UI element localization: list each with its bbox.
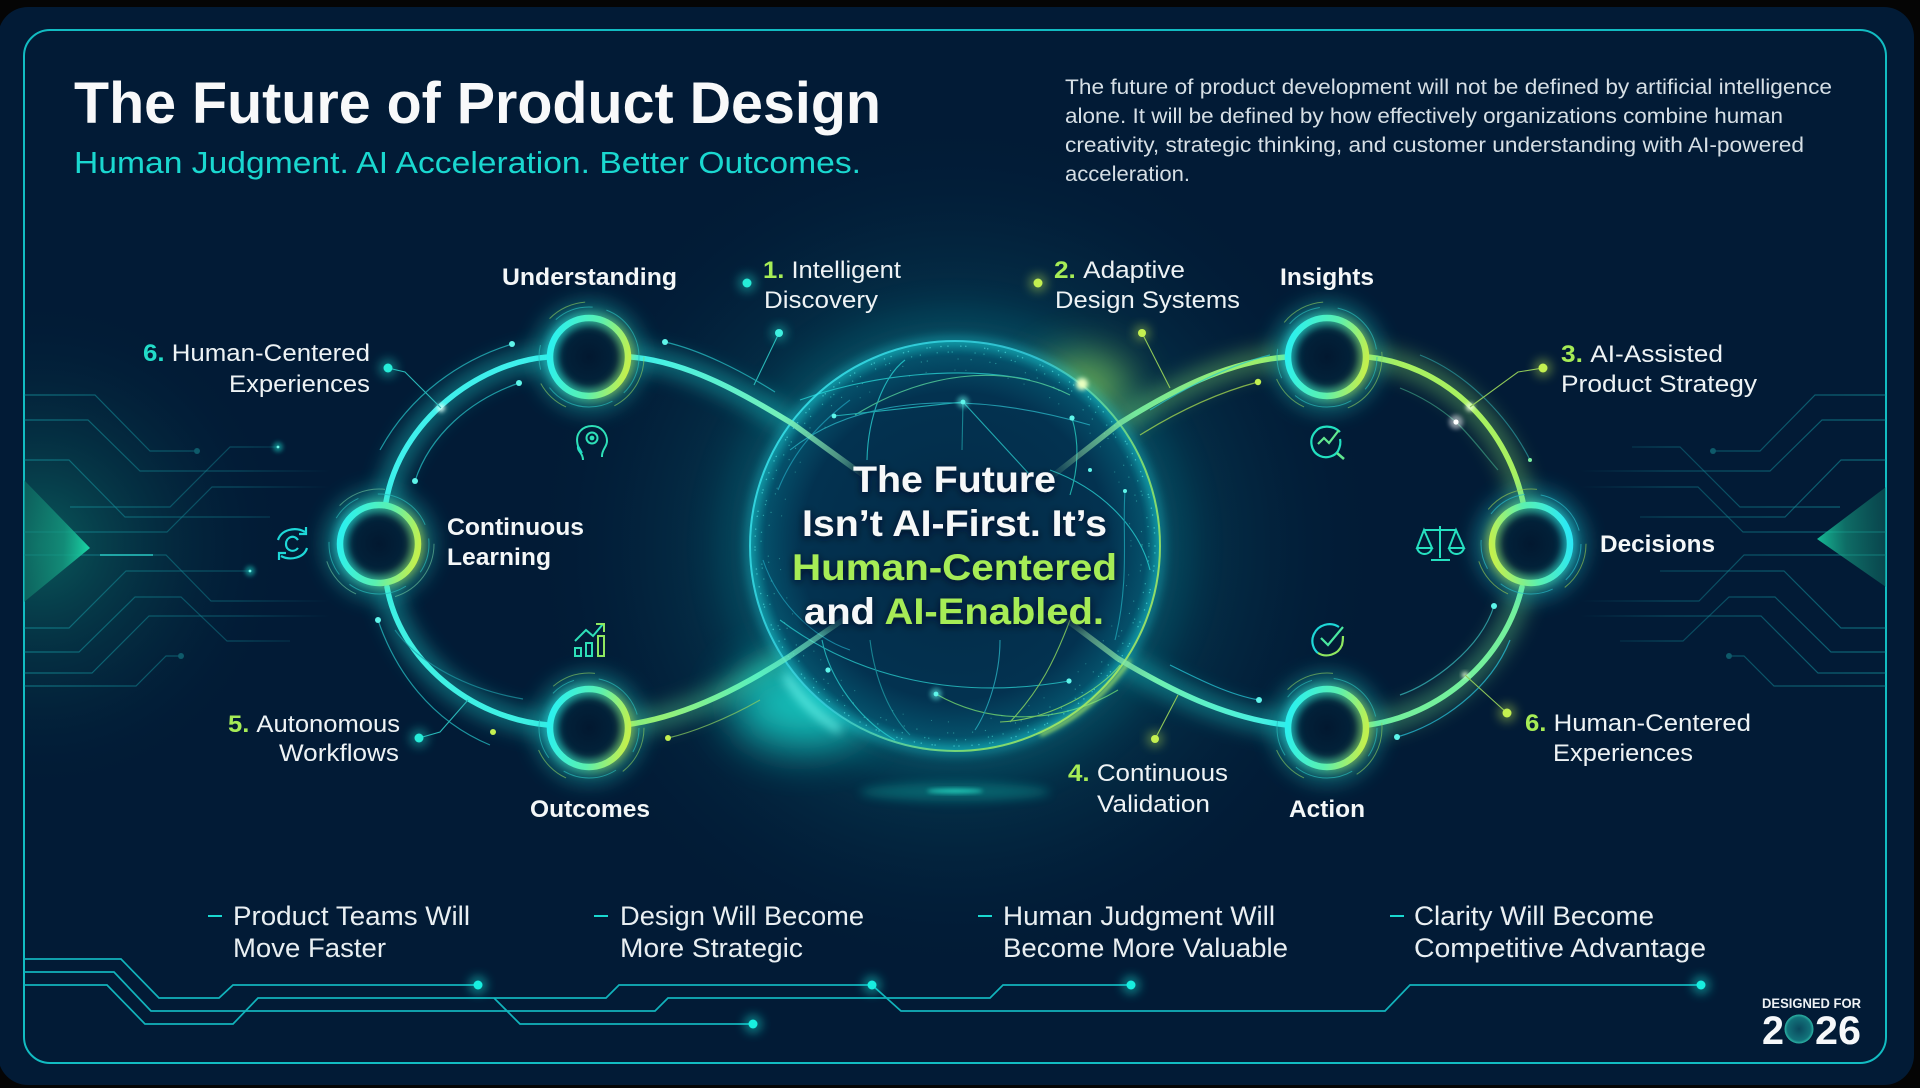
- label: 6 human-centered experiences left: 6. Human-Centered: [143, 340, 370, 367]
- label: 6 human-centered experiences left: [143, 340, 370, 398]
- label: 3 ai-assisted product strategy: 3. AI-Assisted: [1561, 341, 1723, 368]
- node ring: decisions: [1476, 489, 1586, 599]
- badge: designed for 2026: [1762, 996, 1861, 1053]
- center statement: Human-Centered: [792, 546, 1117, 588]
- takeaway: human judgment: Become More Valuable: [1003, 933, 1288, 963]
- icon: balance scale: [1417, 526, 1464, 560]
- label: 3 ai-assisted product strategy: Product Strategy: [1561, 371, 1758, 398]
- takeaway: design: [594, 901, 864, 963]
- left circuit decoration: [24, 395, 330, 686]
- label: continuous learning: Continuous: [447, 514, 584, 541]
- label: 1 intelligent discovery: 1. Intelligent: [763, 257, 901, 284]
- badge: designed for 2026: 2: [1762, 1009, 1784, 1053]
- bottom circuit traces: [24, 959, 1710, 1033]
- takeaway: human judgment: Human Judgment Will: [1003, 901, 1275, 931]
- label: continuous learning: Learning: [447, 544, 551, 571]
- label: 5 autonomous workflows: [228, 711, 400, 767]
- sphere: [730, 321, 1180, 771]
- callout leaders: [379, 274, 1552, 747]
- icon: magnifier insight: [1311, 427, 1344, 459]
- center statement: The Future: [853, 458, 1056, 500]
- intro text block: [1065, 75, 1832, 186]
- icon: head with target: [577, 426, 607, 460]
- right circuit decoration: [1580, 395, 1886, 686]
- takeaway: design: More Strategic: [620, 933, 803, 963]
- intro text block: creativity, strategic thinking, and customer understanding with AI-powered: [1065, 133, 1804, 157]
- label: 6 human-centered experiences left: Experiences: [229, 371, 370, 398]
- label: 1 intelligent discovery: [763, 257, 901, 314]
- title: The Future of Product Design: [74, 71, 881, 136]
- takeaway: product teams: [208, 901, 470, 963]
- right arrow wedge: [1817, 487, 1886, 587]
- label: decisions: Decisions: [1600, 531, 1715, 558]
- node ring: action: [1272, 673, 1382, 783]
- label: 6 human-centered experiences right: 6. Human-Centered: [1525, 710, 1751, 737]
- takeaway: product teams: Product Teams Will: [233, 901, 470, 931]
- takeaway: human judgment: [978, 901, 1288, 963]
- infinity loop glow: [386, 357, 1523, 725]
- takeaway: clarity: [1390, 901, 1706, 963]
- label: 3 ai-assisted product strategy: [1561, 341, 1758, 398]
- sphere dust: [750, 341, 1160, 751]
- takeaway: design: Design Will Become: [620, 901, 864, 931]
- takeaway: clarity: Clarity Will Become: [1414, 901, 1654, 931]
- center statement: Isn’t AI-First. It’s: [802, 502, 1107, 544]
- icon: check circle: [1312, 624, 1343, 655]
- label: 6 human-centered experiences right: Experiences: [1553, 740, 1693, 767]
- center statement: and AI-Enabled.: [804, 590, 1104, 632]
- icon: refresh cycle: [278, 527, 307, 560]
- label: 2 adaptive design systems: 2. Adaptive: [1054, 257, 1185, 284]
- label: 4 continuous validation: 4. Continuous: [1068, 760, 1228, 787]
- thin orbit arcs: [375, 339, 1532, 745]
- intro text block: alone. It will be defined by how effectively organizations combine human: [1065, 104, 1783, 128]
- label: 5 autonomous workflows: 5. Autonomous: [228, 711, 400, 738]
- label: 1 intelligent discovery: Discovery: [764, 287, 879, 314]
- sphere network lines: [763, 360, 1150, 740]
- infinity loop strokes: [386, 357, 1523, 725]
- sphere nodes: [825, 396, 1127, 700]
- label: 2 adaptive design systems: Design Systems: [1055, 287, 1240, 314]
- label: 2 adaptive design systems: [1054, 257, 1240, 314]
- node ring: insights: [1272, 302, 1382, 412]
- center statement: [792, 458, 1117, 632]
- sphere highlights: [1076, 378, 1088, 390]
- label: 5 autonomous workflows: Workflows: [279, 740, 399, 767]
- label: insights: Insights: [1280, 264, 1374, 291]
- intro text block: acceleration.: [1065, 162, 1190, 186]
- label: outcomes: Outcomes: [530, 796, 650, 823]
- label: action: Action: [1289, 796, 1365, 823]
- node ring: outcomes: [534, 673, 644, 783]
- label: 4 continuous validation: [1068, 760, 1228, 818]
- label: understanding: Understanding: [502, 264, 677, 291]
- takeaway: product teams: Move Faster: [233, 933, 386, 963]
- node ring: understanding: [534, 302, 644, 412]
- label: 4 continuous validation: Validation: [1097, 791, 1210, 818]
- label: 6 human-centered experiences right: [1525, 710, 1751, 767]
- badge: designed for 2026: 26: [1815, 1009, 1861, 1053]
- badge: designed for 2026: DESIGNED FOR: [1762, 996, 1861, 1011]
- glow under sphere: [860, 783, 1050, 801]
- left arrow wedge: [24, 480, 153, 602]
- label: continuous learning: [447, 514, 584, 571]
- icon: growth chart: [575, 624, 604, 656]
- node ring: continuous learning: [324, 489, 434, 599]
- subtitle: Human Judgment. AI Acceleration. Better Outcomes.: [74, 146, 861, 180]
- takeaway: clarity: Competitive Advantage: [1414, 933, 1706, 963]
- intro text block: The future of product development will not be defined by artificial intelligence: [1065, 75, 1832, 99]
